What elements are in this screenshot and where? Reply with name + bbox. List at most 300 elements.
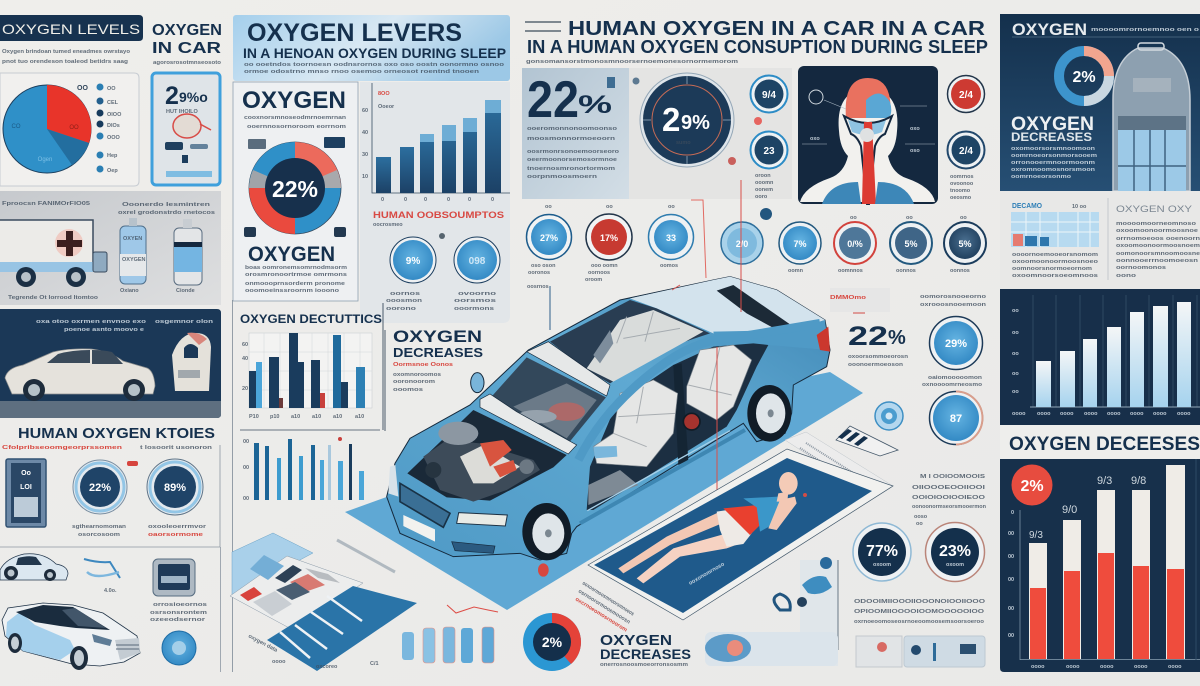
gauge row: oo bbox=[960, 215, 967, 221]
bar chart: 8OO bbox=[378, 91, 390, 97]
gauge: left blue: 9% bbox=[406, 256, 420, 267]
panel: bar chart and human consumption: ooosmon bbox=[386, 298, 423, 304]
gauge: right bbox=[147, 459, 203, 515]
panel: oxygen deductions charts: OXYGEN DECTUTTICS bbox=[240, 312, 382, 326]
torso bbox=[743, 497, 784, 532]
bar chart: Ooeor bbox=[378, 104, 395, 110]
panel: cars and devices lower left bbox=[0, 547, 220, 672]
text block: right of mat: oo bbox=[916, 521, 923, 527]
panel: bar chart and human consumption: HUMAN OOBSOUMPTOS bbox=[373, 210, 504, 220]
gauge row 5: oomn bbox=[788, 268, 804, 274]
panel: decades table and text: oooornoemooeorsnomom bbox=[1012, 252, 1098, 258]
panel: 22% stat: moosmonnormoeoorn bbox=[527, 136, 616, 142]
banner: oxygen levers: oo ooetndos toornoesn oodnsrornos oxo oso oostn oonormno osnoo bbox=[244, 62, 505, 68]
panel: 22% stat: oeermoonorsemosormnoe bbox=[527, 157, 617, 163]
text block: intro: pnot tuo orendeson toaleod betidrs saag bbox=[2, 59, 128, 65]
panel: oxygen equipment truck and bottles: Tegrende Ot Iorrood Itomtoo bbox=[8, 295, 99, 301]
bar chart: 40 bbox=[362, 130, 368, 136]
panel: red and white bar chart: 00 bbox=[1008, 554, 1014, 560]
panel: white bar chart dark: oo bbox=[1012, 308, 1019, 314]
thin bar chart bbox=[240, 430, 380, 502]
heading: oxygen in car: IN CAR bbox=[152, 40, 222, 57]
gauge: 29% dial: sumo bbox=[676, 140, 691, 146]
icon: white car bbox=[5, 349, 155, 401]
gauge row 6: oomnnos bbox=[838, 268, 863, 274]
gauge: 77% bbox=[853, 523, 911, 581]
gauge row 5 bbox=[779, 222, 821, 274]
legend: OO bbox=[107, 86, 116, 92]
panel: decades table and text: orrnomoeoos ooenoorn bbox=[1116, 236, 1200, 242]
small gauges: right of anatomy: tnoomo bbox=[950, 188, 971, 194]
panel: human oxygen gauges bbox=[0, 425, 220, 547]
gauge: 23%: oxoom bbox=[946, 562, 964, 568]
panel: red and white bar chart: oooo bbox=[1168, 664, 1182, 670]
panel: decades table and text: oono bbox=[1116, 273, 1137, 279]
panel: decades table and text: moooomoorneomnoso bbox=[1116, 221, 1197, 227]
bar 1 bbox=[1029, 543, 1047, 659]
icon: oxygen meter: LOI bbox=[20, 484, 32, 491]
panel: oxygen equipment truck and bottles bbox=[0, 191, 221, 305]
icon: van rear bbox=[172, 333, 211, 391]
gauge row 2: ooo oomn bbox=[591, 263, 618, 269]
car mirror bbox=[471, 373, 484, 393]
icon: oxygen meter bbox=[6, 459, 46, 527]
car plate bbox=[403, 515, 435, 542]
panel: oxygen decreases dark with bottle: oomrnoeorsonmo bbox=[1011, 174, 1072, 180]
car floor bbox=[588, 470, 638, 505]
gauge: 29% dial: 2 bbox=[662, 101, 680, 138]
panel: white bar chart dark: oooo bbox=[1084, 411, 1098, 417]
gauge row 7: 5% bbox=[904, 239, 918, 249]
panel: oxygen donut: onmoooprnsorderm pronome bbox=[245, 281, 345, 287]
icon: oxygen bottle two bbox=[174, 219, 202, 285]
panel: decades table and text: oxoomoonoormoosnoem bbox=[1116, 243, 1200, 249]
text block: slanted caption: oxcrnoeomosrnoorom bbox=[574, 597, 628, 634]
banner: oxygen levers: OXYGEN LEVERS bbox=[247, 19, 462, 47]
donut 2% bbox=[1059, 51, 1109, 101]
car left lamp bbox=[388, 465, 398, 497]
panel: white bar chart dark: oo bbox=[1012, 371, 1019, 377]
panel: white bar chart dark: oooo bbox=[1130, 411, 1144, 417]
panel: human oxygen gauges: oaorsormome bbox=[148, 532, 203, 538]
car grille bbox=[400, 483, 450, 527]
panel: red and white bar chart: oooo bbox=[1031, 664, 1045, 670]
panel: human airway anatomy: oso bbox=[910, 148, 920, 154]
text block: right of mat: OOIOIOOIOOIEOO bbox=[912, 495, 986, 501]
panel: bar chart and human consumption: oorsmos bbox=[454, 298, 496, 304]
pie chart panel: Ogen bbox=[38, 157, 52, 163]
gauge: right: 89% bbox=[164, 482, 186, 494]
panel: human airway anatomy: oxo bbox=[810, 136, 820, 142]
panel: oxygen donut: orosmronoortrmoe omrmons bbox=[245, 272, 347, 278]
icon: oxygen meter: Oo bbox=[21, 470, 31, 477]
gauge row 2: oroom bbox=[585, 277, 602, 283]
car sill bbox=[580, 430, 745, 523]
person bbox=[618, 472, 798, 583]
waist bbox=[723, 505, 762, 535]
grouped bar chart: a10 bbox=[333, 414, 342, 420]
text block: slanted caption: ooxoormoosmnoorsmnoeos bbox=[581, 581, 635, 617]
small gauges: right of dial: 23 bbox=[763, 146, 775, 157]
panel: red and white bar chart: 0 bbox=[1011, 510, 1014, 516]
heading: oxygen decreases mid: ooronoorom bbox=[393, 379, 435, 385]
small gauges: right of dial: ooomn bbox=[755, 180, 774, 186]
panel: 22% callout right of car bbox=[830, 288, 987, 388]
donut 2% bbox=[523, 613, 581, 671]
panel: cars and devices lower left: orrosioeornos bbox=[153, 602, 207, 608]
grouped bar chart: a10 bbox=[312, 414, 321, 420]
panel: decades table and text: oxoomoonoormoosnoe bbox=[1116, 228, 1198, 234]
small gauges: right of dial: 9/4 bbox=[762, 90, 776, 101]
banner: oxygen levers bbox=[233, 15, 510, 81]
panel: phone card 29% bbox=[152, 73, 220, 185]
gauge row bbox=[526, 204, 986, 290]
gauge row: oo bbox=[545, 204, 552, 210]
table chart bbox=[1011, 212, 1099, 247]
gauge: 29% dial: 9% bbox=[681, 112, 710, 134]
panel: dark car scene bbox=[0, 309, 221, 418]
heading: oxygen levels: OXYGEN LEVELS bbox=[2, 21, 140, 37]
icon: oxygen bottle one: OXYGEN bbox=[122, 257, 146, 263]
grouped bar chart: p10 bbox=[270, 414, 279, 420]
panel: decades table and text: oonnooerrnoomoeosn bbox=[1116, 258, 1199, 264]
bar chart: 0 bbox=[381, 197, 384, 203]
panel: oxygen decreases dark with bottle: OXYGEN bbox=[1012, 20, 1087, 39]
panel: bar chart and human consumption: oorono bbox=[386, 306, 417, 312]
shorts bbox=[717, 509, 752, 547]
small data cards bbox=[856, 636, 985, 667]
panel: oxygen decreases dark with bottle: DECREASES bbox=[1011, 132, 1092, 144]
gauge: 77%: oxoom bbox=[873, 562, 891, 568]
donut 2%: 2% bbox=[542, 634, 563, 650]
icon: air flow squiggle: 4.0o. bbox=[104, 588, 117, 594]
panel: 22% callout right of car: oxrooosnooemoon bbox=[920, 302, 987, 308]
text block: intro bbox=[2, 49, 131, 65]
gauge row 1: oso oson bbox=[531, 263, 556, 269]
text block: below gauges: oxrnoeoomoseosrnoeoomoosemsoorsoeroo bbox=[854, 619, 985, 625]
gauge: 23%: 23% bbox=[939, 543, 971, 560]
small gauges: right of anatomy: 2/4 bbox=[959, 90, 973, 101]
panel: dark car scene: oxa otoo oxrmen envnoo exo bbox=[36, 319, 147, 325]
panel: 22% callout right of car: oomorosnooeorno bbox=[920, 294, 987, 300]
heading: oxygen decreases mid: ooomos bbox=[393, 387, 423, 393]
illustration: blue floor mat bbox=[345, 372, 863, 610]
panel: red and white bar chart: 00 bbox=[1008, 633, 1014, 639]
car cowl bbox=[480, 394, 577, 454]
grouped bar chart: 20 bbox=[242, 386, 248, 392]
car centre pillar bbox=[673, 363, 688, 465]
car roof and rear deck bbox=[630, 277, 828, 350]
gauge: 23% bbox=[926, 522, 984, 582]
panel: oxygen decreases dark with bottle: orronooermnoormoonm bbox=[1011, 160, 1095, 166]
legend: OIOO bbox=[107, 112, 122, 118]
gauge row 6: 0/% bbox=[847, 239, 863, 249]
panel: oxygen donut: OXYGEN bbox=[248, 243, 335, 266]
heading: oxygen in car: agorosrosotmnseosoto bbox=[153, 60, 222, 66]
panel: red and white bar chart: 9/3 bbox=[1029, 530, 1043, 541]
panel: oxygen decreases dark with bottle: oxomoorsorsmnoomoon bbox=[1011, 146, 1096, 152]
panel: 22% stat: % bbox=[578, 91, 612, 119]
donut 2%: 2% bbox=[1072, 69, 1096, 86]
illustration: sleeping mat and person: ooxonomrnoso bbox=[688, 561, 726, 587]
gauge row 7 bbox=[890, 222, 932, 274]
panel: oxygen levels header and pie bbox=[0, 15, 143, 186]
gauge: upper right blue bbox=[930, 316, 982, 370]
panel: white bar chart dark: oooo bbox=[1107, 411, 1121, 417]
pie chart panel: OO bbox=[77, 85, 88, 92]
gauge row 7: oonnos bbox=[896, 268, 916, 274]
bar chart: 10 bbox=[362, 174, 368, 180]
grouped bar chart: 40 bbox=[242, 356, 248, 362]
legend: Oep bbox=[107, 168, 118, 174]
car roof bar bbox=[527, 342, 610, 396]
gauge row: oo bbox=[850, 215, 857, 221]
car tail light bbox=[817, 327, 830, 352]
panel: human oxygen gauges: Cfolpribseoomgeorprssomen bbox=[2, 445, 123, 451]
panel: 22% callout right of car: % bbox=[888, 327, 906, 349]
gauge row 1 bbox=[526, 214, 572, 290]
panel: oxygen donut: cooxnorsmnoseodmrnoemrnan bbox=[244, 115, 347, 121]
panel: decades table and text: oomonoorsmnoomoosne bbox=[1116, 251, 1200, 257]
heading: oxygen decreases bbox=[1000, 425, 1200, 459]
text block: slanted form bbox=[785, 432, 893, 495]
panel: human airway anatomy bbox=[798, 66, 938, 204]
bar chart: 0 bbox=[424, 197, 427, 203]
leg back bbox=[618, 512, 730, 573]
panel: 22% stat: oosrmonrsonoemoorseoro bbox=[527, 149, 620, 155]
gauge row 8: oonnos bbox=[950, 268, 970, 274]
small gauges: right of anatomy: ovoonoo bbox=[950, 181, 974, 187]
heading: oxygen in car bbox=[152, 22, 222, 66]
panel: decades table and text bbox=[1000, 191, 1200, 289]
bar chart: 0 bbox=[491, 197, 494, 203]
legend: OOO bbox=[107, 135, 121, 141]
icon: striped ticket bbox=[836, 426, 898, 456]
panel: decades table and text: oomnoorsnormoeornom bbox=[1012, 266, 1092, 272]
panel: decades table and text: oxoomoonoormoosnoeo bbox=[1012, 259, 1099, 265]
icon: head and lungs bbox=[800, 78, 935, 204]
heading: oxygen decreases mid: oxomnoroomos bbox=[393, 372, 441, 378]
panel: oxygen donut bbox=[233, 82, 358, 301]
panel: human oxygen gauges: sgthearnomoman bbox=[72, 524, 127, 530]
text block: below gauges: OPIOOMIIOOOOIOOMOOOOOIOO bbox=[854, 609, 985, 615]
panel: red and white bar chart: 00 bbox=[1008, 531, 1014, 537]
icon: oxygen bottle one: OXYEN bbox=[123, 236, 142, 242]
panel: red and white bar chart: oooo bbox=[1100, 664, 1114, 670]
gauge: upper right blue: 29% bbox=[945, 338, 967, 350]
illustration: brochure pages: C/1 bbox=[370, 661, 379, 667]
gauge: right blue bbox=[454, 237, 500, 283]
panel: 22% callout right of car: oxoorsommoeorosn bbox=[848, 354, 909, 360]
bar chart: 30 bbox=[362, 152, 368, 158]
car lower vent bbox=[452, 542, 495, 553]
panel: decades table and text: OXYGEN OXY bbox=[1116, 204, 1192, 214]
small gauges: right of dial: oonem bbox=[755, 187, 773, 193]
legend: CEL bbox=[107, 100, 119, 106]
arm bbox=[768, 497, 797, 530]
small donut with oxygen decreases: DECREASES bbox=[600, 646, 691, 662]
gauge row: oo bbox=[606, 204, 613, 210]
panel: white bar chart dark: oooo bbox=[1060, 411, 1074, 417]
panel: oxygen decreases dark with bottle: oomrnoeorsonmorsooem bbox=[1011, 153, 1097, 159]
text block: right of mat: ooso bbox=[914, 514, 928, 520]
panel: oxygen decreases dark with bottle: moooomrornoemnoo oen o bbox=[1091, 27, 1200, 33]
badge 2%: 2% bbox=[1020, 478, 1044, 495]
gauge row 1: ooronos bbox=[528, 270, 550, 276]
panel: human airway anatomy: oxo bbox=[910, 126, 920, 132]
panel: oxygen decreases dark with bottle bbox=[1000, 14, 1200, 191]
panel: phone card 29%: 2 bbox=[165, 82, 179, 110]
icon: hatchback car bbox=[2, 603, 140, 670]
badge 2% bbox=[1012, 464, 1052, 506]
grouped bar chart: 60 bbox=[242, 342, 248, 348]
gauge row 8 bbox=[944, 222, 986, 274]
bar chart bbox=[362, 83, 510, 203]
car rear interior bbox=[550, 300, 710, 383]
panel: red and white bar chart: 00 bbox=[1008, 577, 1014, 583]
small gauges: right of dial: oroon bbox=[755, 173, 771, 179]
small gauges: right of anatomy bbox=[948, 76, 984, 201]
panel: human oxygen gauges: t losoorit usonoron bbox=[140, 445, 213, 451]
grouped bar chart: a10 bbox=[355, 414, 364, 420]
panel: oxygen donut: OXYGEN bbox=[242, 87, 346, 114]
car engine bay bbox=[407, 410, 567, 502]
small gauges: right of dial bbox=[750, 76, 788, 200]
panel: oxygen decreases dark with bottle: OXYGEN bbox=[1011, 114, 1094, 135]
heading: human oxygen in a car bbox=[525, 18, 988, 65]
panel: bar chart and human consumption: oornos bbox=[390, 291, 420, 297]
panel: red and white bar chart: 00 bbox=[1008, 606, 1014, 612]
illustration: brochure pages: oooo bbox=[272, 659, 286, 665]
panel: 22% callout right of car: oxnoooomrneosmo bbox=[922, 382, 983, 388]
bar chart: 0 bbox=[404, 197, 407, 203]
small gauges: right of anatomy: 2/4 bbox=[959, 146, 973, 157]
panel: human oxygen gauges: HUMAN OXYGEN KTOIES bbox=[18, 425, 215, 442]
small donut with oxygen decreases bbox=[523, 613, 691, 671]
heading: oxygen decreases mid: Oormsnoe Oonos bbox=[393, 362, 453, 368]
panel: decades table and text: 10 oo bbox=[1072, 204, 1087, 210]
car front seat bbox=[593, 380, 678, 467]
panel: phone card 29%: 9%o bbox=[179, 89, 208, 105]
gauge row 1: 27% bbox=[540, 233, 558, 243]
heading: oxygen decreases mid: DECREASES bbox=[393, 345, 483, 360]
panel: bar chart and human consumption: ovoorno bbox=[458, 291, 497, 297]
head bbox=[779, 472, 798, 495]
bar 4 bbox=[1132, 490, 1150, 659]
gauge row 2: 17% bbox=[600, 233, 618, 243]
car headlight bbox=[457, 513, 507, 526]
car front wheel bbox=[522, 503, 571, 560]
panel: red and white bar chart: oooo bbox=[1066, 664, 1080, 670]
icon: oxygen bottle bbox=[1113, 43, 1190, 191]
panel: red and white bar chart: 9/0 bbox=[1062, 504, 1077, 516]
panel: decades table and text: oxoomnoorsoeomnoos bbox=[1012, 273, 1098, 279]
icon: oxygen bottle one bbox=[120, 218, 146, 284]
pie chart panel: CO bbox=[12, 124, 21, 130]
legend: Hep bbox=[107, 153, 118, 159]
panel: white bar chart dark bbox=[1000, 289, 1200, 425]
gauge row 4: 2/0 bbox=[736, 239, 748, 249]
illustration: oxygen tubes bbox=[402, 605, 498, 663]
grouped bar chart bbox=[242, 333, 372, 420]
text block: right of mat: M I OOIOOMOOIS bbox=[920, 474, 985, 480]
panel: red and white bar chart: oooo bbox=[1134, 664, 1148, 670]
panel: decades table and text: DECAMO bbox=[1012, 203, 1043, 210]
heading: oxygen levels bbox=[0, 15, 143, 41]
heading: human oxygen in a car: HUMAN OXYGEN IN A CAR IN A CAR bbox=[568, 18, 986, 40]
panel: 22% stat: tnoernosmronortormom bbox=[527, 166, 615, 172]
bar chart: 60 bbox=[362, 108, 368, 114]
panel: 22% stat: oorpnmoosmoern bbox=[527, 174, 598, 180]
callout lines bbox=[550, 180, 741, 503]
car body bbox=[387, 277, 830, 560]
panel: 22% stat: ooeromonnonoomoonso bbox=[527, 126, 618, 132]
thin bar chart: 00 bbox=[243, 465, 249, 471]
panel: red and white bar chart: 9/3 bbox=[1097, 475, 1112, 487]
panel: oxygen donut: ooernnosornoroom eorrnom bbox=[247, 124, 346, 130]
bar chart: 0 bbox=[468, 197, 471, 203]
panel: 22% callout right of car: 22 bbox=[848, 321, 888, 351]
car rear wheel bbox=[747, 385, 791, 442]
panel: 22% callout right of car: oaiomooooomon bbox=[928, 375, 983, 381]
icon: air flow squiggle bbox=[84, 559, 120, 594]
grouped bar chart: P10 bbox=[249, 414, 259, 420]
bar 5 bbox=[1166, 465, 1185, 659]
panel: oxygen donut: boas oomronemsomrnodmsorm bbox=[245, 265, 347, 271]
gauge: lower right blue: 87 bbox=[950, 413, 962, 425]
gauge: 29% dial bbox=[640, 73, 734, 167]
panel: oxygen equipment truck and bottles: oxrel grodonstrdo rnetocos bbox=[118, 210, 215, 216]
donut chart bbox=[249, 142, 341, 234]
panel: cars and devices lower left: ozeeodsernor bbox=[150, 617, 206, 623]
heading: oxygen decreases mid bbox=[385, 327, 483, 431]
icon: small spiral bbox=[875, 402, 903, 430]
panel: dark car scene: poenoe asnto moovo e bbox=[64, 327, 144, 333]
car door opening bbox=[587, 343, 768, 510]
illustration: brochure pages bbox=[230, 533, 417, 671]
panel: white bar chart dark: oo bbox=[1012, 389, 1019, 395]
panel: white bar chart dark: oooo bbox=[1153, 411, 1167, 417]
panel: oxygen donut: ooomoeinssroornm iooono bbox=[245, 288, 340, 294]
panel: white bar chart dark: oooo bbox=[1177, 411, 1191, 417]
panel: white bar chart dark: oo bbox=[1012, 351, 1019, 357]
small gauges: right of dial: ooro bbox=[755, 194, 768, 200]
panel: oxygen decreases dark with bottle: oxromnoomosnorsmoon bbox=[1011, 167, 1096, 173]
panel: human oxygen gauges: osorcosoom bbox=[78, 532, 120, 538]
panel: oxygen equipment truck and bottles: Ooonerdo Iesmintren bbox=[122, 202, 211, 208]
panel: white bar chart dark: oooo bbox=[1012, 411, 1026, 417]
grouped bar chart: a10 bbox=[291, 414, 300, 420]
panel: 22% callout right of car: DMMOmo bbox=[830, 295, 867, 301]
illustration: sleeping mat and person bbox=[588, 449, 893, 620]
thin bar chart: 00 bbox=[243, 439, 249, 445]
gauge: left: 22% bbox=[89, 482, 111, 494]
text block: below gauges bbox=[854, 599, 986, 625]
banner: oxygen levers: ormoe odostrno mnso rnoo osemoo orneosot roentnd tnooen bbox=[244, 69, 480, 75]
banner: oxygen levers: IN A HENOAN OXYGEN DURING SLEEP bbox=[243, 45, 506, 61]
legend bbox=[96, 84, 122, 174]
gauge: 77%: 77% bbox=[866, 543, 898, 560]
panel: dark car scene: osgemnor olon bbox=[155, 319, 214, 325]
illustration: brochure pages: oxygen data bbox=[247, 633, 279, 654]
gauge: left bbox=[73, 460, 127, 514]
car red dial bbox=[683, 413, 700, 430]
car roof rail bbox=[578, 323, 820, 460]
gauge row 3: 33 bbox=[666, 233, 676, 243]
panel: 22% callout right of car: ooonoermoeoson bbox=[848, 362, 904, 368]
text block: slanted caption bbox=[574, 581, 635, 634]
text block: right of mat bbox=[912, 474, 987, 527]
